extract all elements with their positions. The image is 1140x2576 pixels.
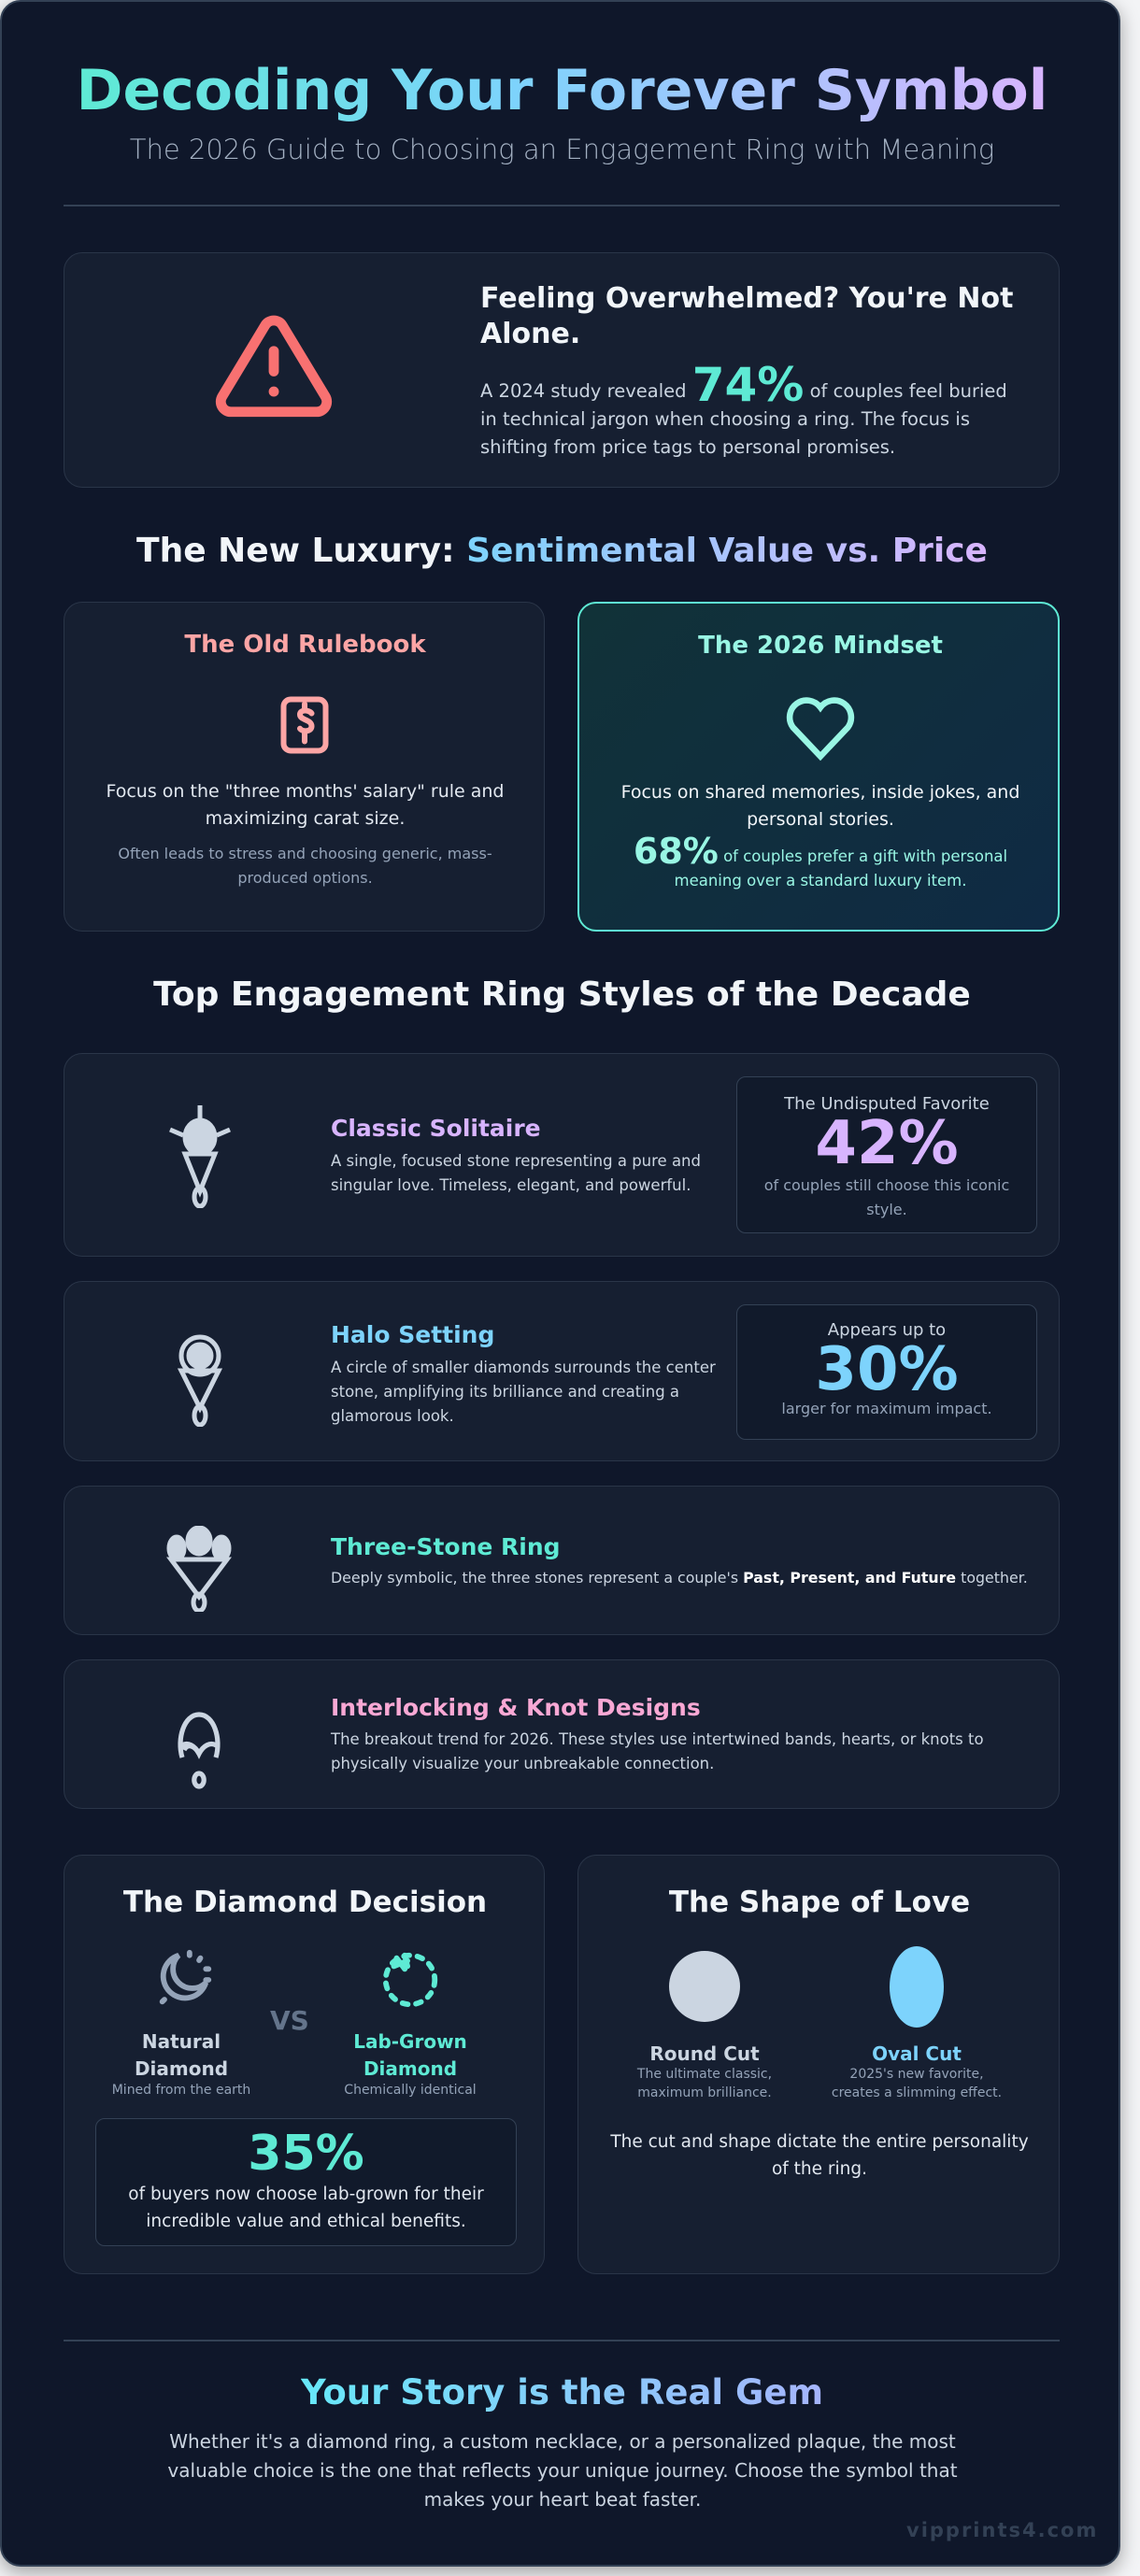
text: natural diamond: Mined from the earth <box>112 2083 250 2098</box>
stat box: 30%: larger for maximum impact. <box>781 1400 992 1417</box>
text: lab-grown diamond: Lab-Grown Diamond <box>353 2030 467 2080</box>
text: closing paragraph: Whether it's a diamond ring, a custom necklace, or a personalized plaque, the most valuable choice is the one that reflects your unique journey. Choose the symbol that makes your heart beat faster. <box>167 2430 958 2511</box>
heading: three-stone: Three-Stone Ring <box>331 1533 561 1560</box>
heading: halo: Halo Setting <box>331 1321 494 1348</box>
text: 68% stat: 68% of couples prefer a gift with personal meaning over a standard luxury item. <box>634 831 1007 890</box>
heading: top styles: Top Engagement Ring Styles of the Decade <box>153 975 971 1014</box>
heading: shape of love: The Shape of Love <box>669 1886 970 1919</box>
panel: shape of love <box>577 1855 1060 2274</box>
text: old rulebook note: Often leads to stress and choosing generic, mass-produced options. <box>118 845 492 887</box>
text: mindset description: Focus on shared memories, inside jokes, and personal stories. <box>621 782 1019 830</box>
text: 74% stat: A 2024 study revealed 74% of couples feel buried in technical jargon when choosing a ring. The focus is shifting from price tags to personal promises. <box>480 358 1007 458</box>
icon: lab-grown sparkle <box>383 1953 437 2007</box>
text: natural diamond: Natural Diamond <box>135 2030 228 2080</box>
subtitle: The 2026 Guide to Choosing an Engagement Ring with Meaning <box>130 134 994 165</box>
panel: three-stone <box>64 1486 1060 1635</box>
text: round cut: The ultimate classic, maximum brilliance. <box>637 2067 772 2100</box>
stat box: 30% <box>736 1304 1037 1440</box>
heading: classic solitaire: Classic Solitaire <box>331 1115 541 1142</box>
panel: halo setting <box>64 1281 1060 1461</box>
heading: your story: Your Story is the Real Gem <box>301 2372 823 2412</box>
panel: classic solitaire <box>64 1053 1060 1257</box>
icon: three-stone ring <box>166 1526 232 1612</box>
title: Decoding Your Forever Symbol <box>77 58 1047 123</box>
heading: new luxury: The New Luxury: Sentimental Value vs. Price <box>136 532 988 570</box>
icon: dollar tag <box>280 697 329 753</box>
stat box: 42%: 42% <box>815 1109 959 1178</box>
text: round cut <box>637 2042 772 2100</box>
text: shape note: The cut and shape dictate the entire personality of the ring. <box>610 2132 1029 2179</box>
heading: overwhelmed: Feeling Overwhelmed? You're Not Alone. <box>480 282 1013 350</box>
text: oval cut <box>832 2042 1002 2100</box>
text: three-stone description: Deeply symbolic, the three stones represent a couple's Past, Present, and Future together. <box>331 1569 1028 1587</box>
panel: interlocking <box>64 1659 1060 1809</box>
icon: round cut <box>669 1951 740 2022</box>
text: old rulebook description: Focus on the "three months' salary" rule and maximizing carat size. <box>106 781 505 829</box>
text: natural diamond <box>112 2030 250 2098</box>
stat box: 42%: The Undisputed Favorite <box>784 1094 990 1114</box>
stat box: 42% <box>736 1076 1037 1233</box>
text: oval cut: Oval Cut <box>872 2042 962 2065</box>
stat box: 30%: 30% <box>815 1335 959 1404</box>
text: oval cut: 2025's new favorite, <box>849 2067 984 2082</box>
icon: warning triangle <box>215 316 333 417</box>
stat box: 42%: of couples still choose this iconic style. <box>764 1176 1009 1218</box>
text: lab-grown diamond: Chemically identical <box>344 2083 477 2098</box>
heading: mindset: The 2026 Mindset <box>698 632 943 660</box>
text: solitaire description: A single, focused stone representing a pure and singular love. Timeless, elegant, and powerful. <box>331 1152 701 1194</box>
text: round cut: Round Cut <box>649 2042 760 2065</box>
icon: halo ring <box>178 1334 222 1427</box>
text: oval cut: creates a slimming effect. <box>832 2085 1002 2100</box>
icon: heart <box>787 697 854 761</box>
panel: diamond decision <box>64 1855 545 2274</box>
icon: oval cut <box>890 1946 944 2028</box>
panel: old rulebook <box>64 602 545 932</box>
heading: old rulebook: The Old Rulebook <box>184 631 426 659</box>
stat box: 30%: Appears up to <box>828 1320 946 1340</box>
stat box: 35%: of buyers now choose lab-grown for their incredible value and ethical benefits. <box>128 2185 484 2231</box>
icon: natural diamond moon <box>159 1949 211 2005</box>
footer: brand: vipprints4.com <box>906 2519 1098 2541</box>
icon: solitaire ring <box>169 1105 231 1208</box>
text: interlocking description: The breakout trend for 2026. These styles use intertwined bands, hearts, or knots to physically visualize your unbreakable connection. <box>331 1730 984 1772</box>
stat box: 35% <box>95 2118 517 2246</box>
text: vs: VS <box>270 2005 309 2036</box>
heading: diamond decision: The Diamond Decision <box>123 1886 487 1919</box>
text: halo description: A circle of smaller diamonds surrounds the center stone, amplifying its brilliance and creating a glamorous look. <box>331 1359 716 1425</box>
icon: knot ring <box>178 1712 221 1789</box>
panel: overwhelmed <box>64 252 1060 488</box>
heading: interlocking: Interlocking & Knot Designs <box>331 1694 701 1721</box>
stat box: 35%: 35% <box>248 2126 364 2182</box>
text: lab-grown diamond <box>344 2030 477 2098</box>
panel: 2026 mindset <box>577 602 1060 932</box>
